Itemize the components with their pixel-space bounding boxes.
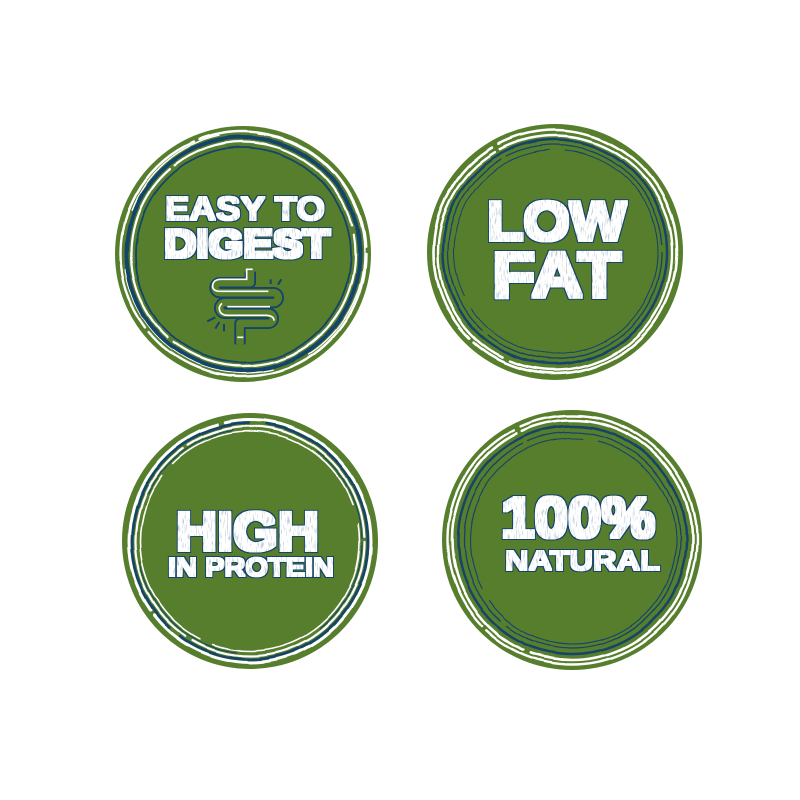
heading: high in protein: HIGH xyxy=(176,502,319,562)
badge: high in protein xyxy=(122,413,378,669)
badge: easy to digest xyxy=(115,126,371,382)
heading: low fat: LOW xyxy=(487,190,626,252)
badge disc xyxy=(427,124,683,380)
badge: low fat xyxy=(427,124,683,380)
heading: easy to digest xyxy=(164,191,330,266)
heading: low fat xyxy=(487,190,626,311)
heading: high in protein xyxy=(168,502,334,582)
heading: easy to digest: DIGEST xyxy=(164,223,330,266)
heading: low fat: FAT xyxy=(492,239,621,311)
hand-drawn rings xyxy=(120,132,366,376)
icon: intestine xyxy=(207,269,281,344)
badge disc xyxy=(115,126,371,382)
badge disc xyxy=(122,413,378,669)
hand-drawn rings xyxy=(448,416,696,664)
badge disc xyxy=(442,410,702,670)
hand-drawn rings xyxy=(434,130,676,374)
heading: easy to digest: EASY TO xyxy=(165,191,325,228)
heading: 100% natural: 100% xyxy=(501,486,655,550)
badge: 100% natural xyxy=(442,410,702,670)
heading: 100% natural: NATURAL xyxy=(505,545,660,576)
heading: high in protein: IN PROTEIN xyxy=(168,552,334,582)
hand-drawn rings xyxy=(129,420,371,662)
heading: 100% natural xyxy=(501,486,660,576)
